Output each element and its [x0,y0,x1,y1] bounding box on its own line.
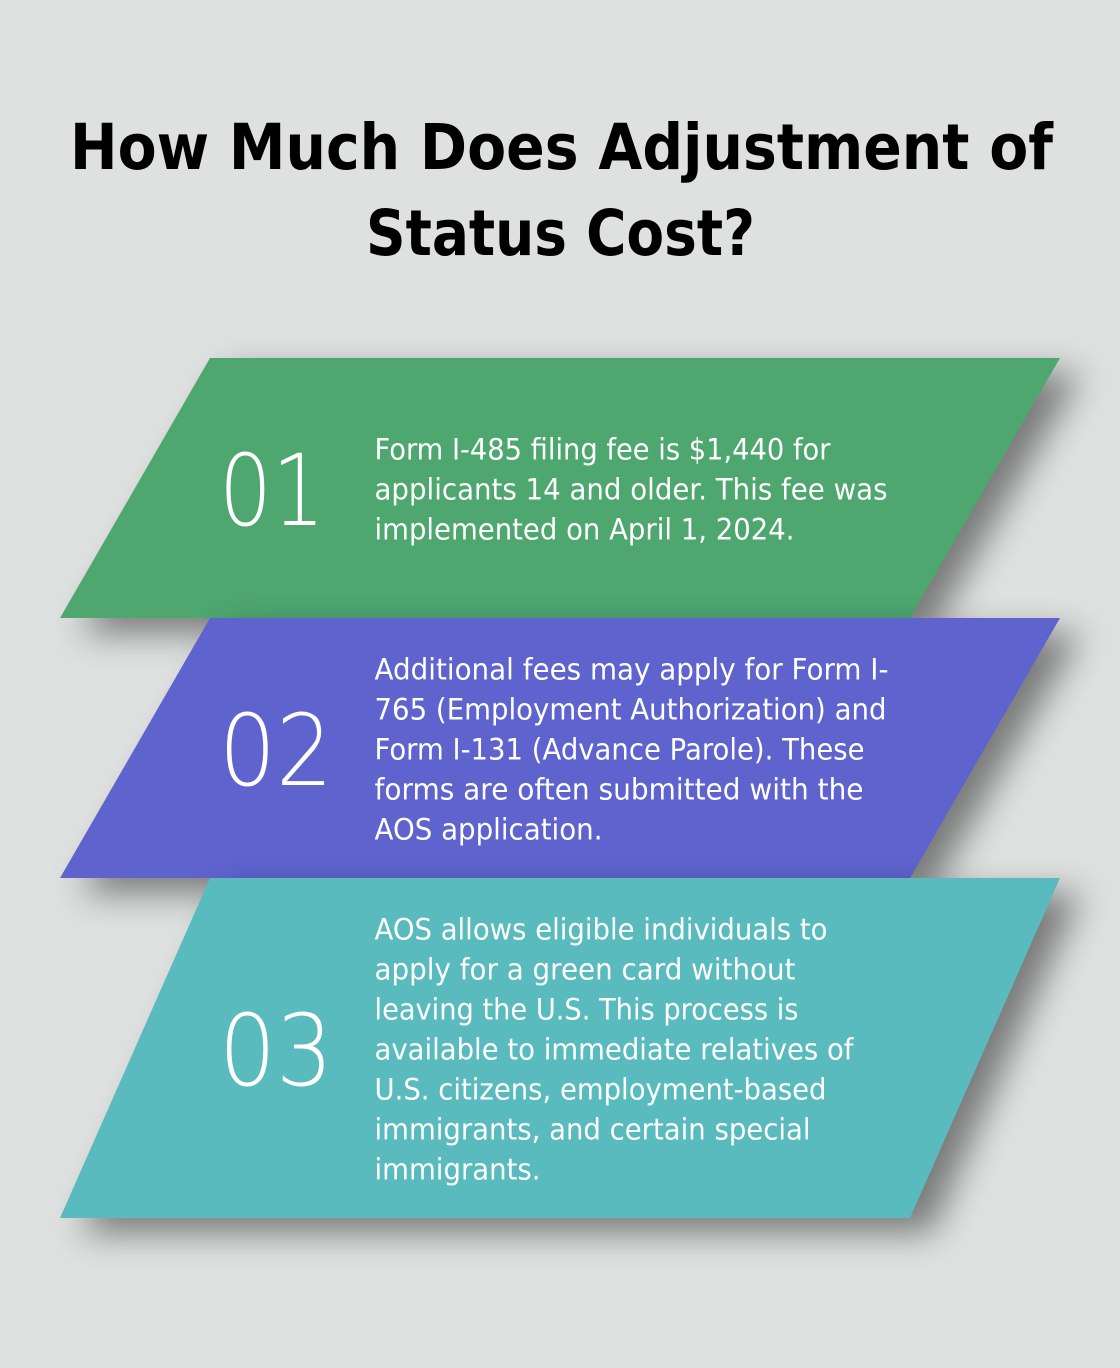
text: filing fee: applicants 14 and older. This fee was [374,472,888,506]
number 02: 02 [219,694,333,809]
text: additional fees: forms are often submitted with the [374,772,864,806]
number 01: 01 [219,434,325,549]
teal parallelogram [60,878,1060,1218]
purple parallelogram [60,618,1060,878]
title: Status Cost? [366,197,755,270]
text: additional fees: AOS application. [374,812,602,846]
panel: step 03 AOS eligibility [60,878,1060,1218]
text: filing fee: Form I-485 filing fee is $1,440 for [374,432,831,466]
text: additional fees [374,652,888,846]
green parallelogram [60,358,1060,618]
panel: step 01 filing fee [60,358,1060,618]
text: AOS eligibility: U.S. citizens, employment-based [374,1072,826,1106]
text: filing fee [374,432,888,546]
text: additional fees: 765 (Employment Authorization) and [374,692,886,726]
text: AOS eligibility: apply for a green card without [374,952,796,986]
text: AOS eligibility: immigrants. [374,1152,540,1186]
text: filing fee: implemented on April 1, 2024. [374,512,794,546]
text: AOS eligibility: immigrants, and certain special [374,1112,810,1146]
number 03: 03 [219,994,333,1109]
text: AOS eligibility: AOS allows eligible individuals to [374,912,828,946]
title [70,111,1054,270]
panel: step 02 additional fees [60,618,1060,878]
text: AOS eligibility: available to immediate relatives of [374,1032,854,1066]
text: additional fees: Additional fees may apply for Form I- [374,652,888,686]
text: AOS eligibility: leaving the U.S. This process is [374,992,798,1026]
text: additional fees: Form I-131 (Advance Parole). These [374,732,864,766]
text: AOS eligibility [374,912,854,1186]
